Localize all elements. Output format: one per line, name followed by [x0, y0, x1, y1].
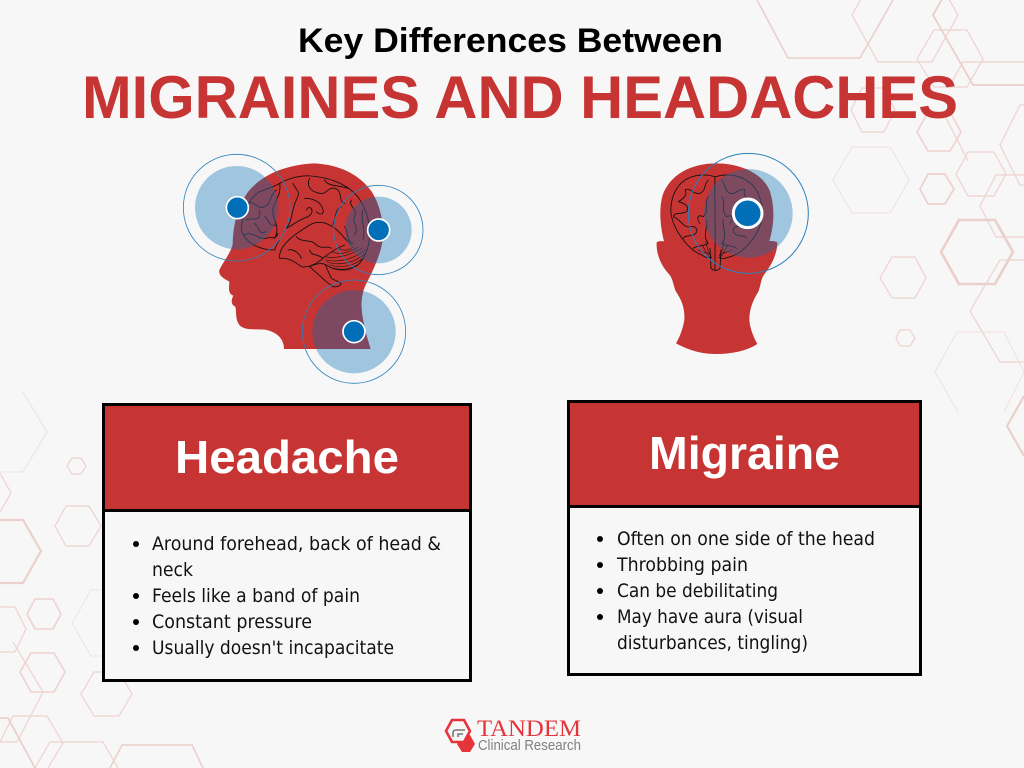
list: headache traits: neck	[152, 559, 193, 581]
heading: headache: Headache	[175, 431, 399, 483]
list: headache traits: Usually doesn't incapacitate	[152, 637, 394, 659]
list: headache traits: Around forehead, back of head &	[152, 533, 441, 555]
panel: headache	[103, 404, 471, 680]
panel: migraine	[568, 402, 921, 674]
list: migraine traits	[597, 528, 875, 654]
icon: hexagon mark	[446, 720, 475, 752]
list: migraine traits: disturbances, tingling)	[617, 632, 808, 654]
list: migraine traits: Throbbing pain	[616, 554, 748, 576]
illustration: back of head with one-sided pain point	[657, 153, 808, 354]
list: migraine traits: May have aura (visual	[617, 606, 803, 628]
logo: Tandem Clinical Research	[446, 716, 581, 754]
logo: Tandem Clinical Research: Clinical Research	[478, 738, 581, 754]
illustration: side head with three pain points	[183, 154, 423, 383]
title: key differences: Key Differences Between	[298, 22, 723, 60]
list: migraine traits: Often on one side of the head	[617, 528, 875, 550]
list: headache traits: Feels like a band of pain	[152, 585, 360, 607]
list: migraine traits: Can be debilitating	[617, 580, 778, 602]
list: headache traits: Constant pressure	[152, 611, 312, 633]
logo: Tandem Clinical Research: TANDEM	[477, 716, 581, 741]
list: headache traits	[133, 533, 441, 659]
title: migraines and headaches: MIGRAINES AND HEADACHES	[82, 64, 958, 131]
heading: migraine: Migraine	[649, 427, 840, 479]
